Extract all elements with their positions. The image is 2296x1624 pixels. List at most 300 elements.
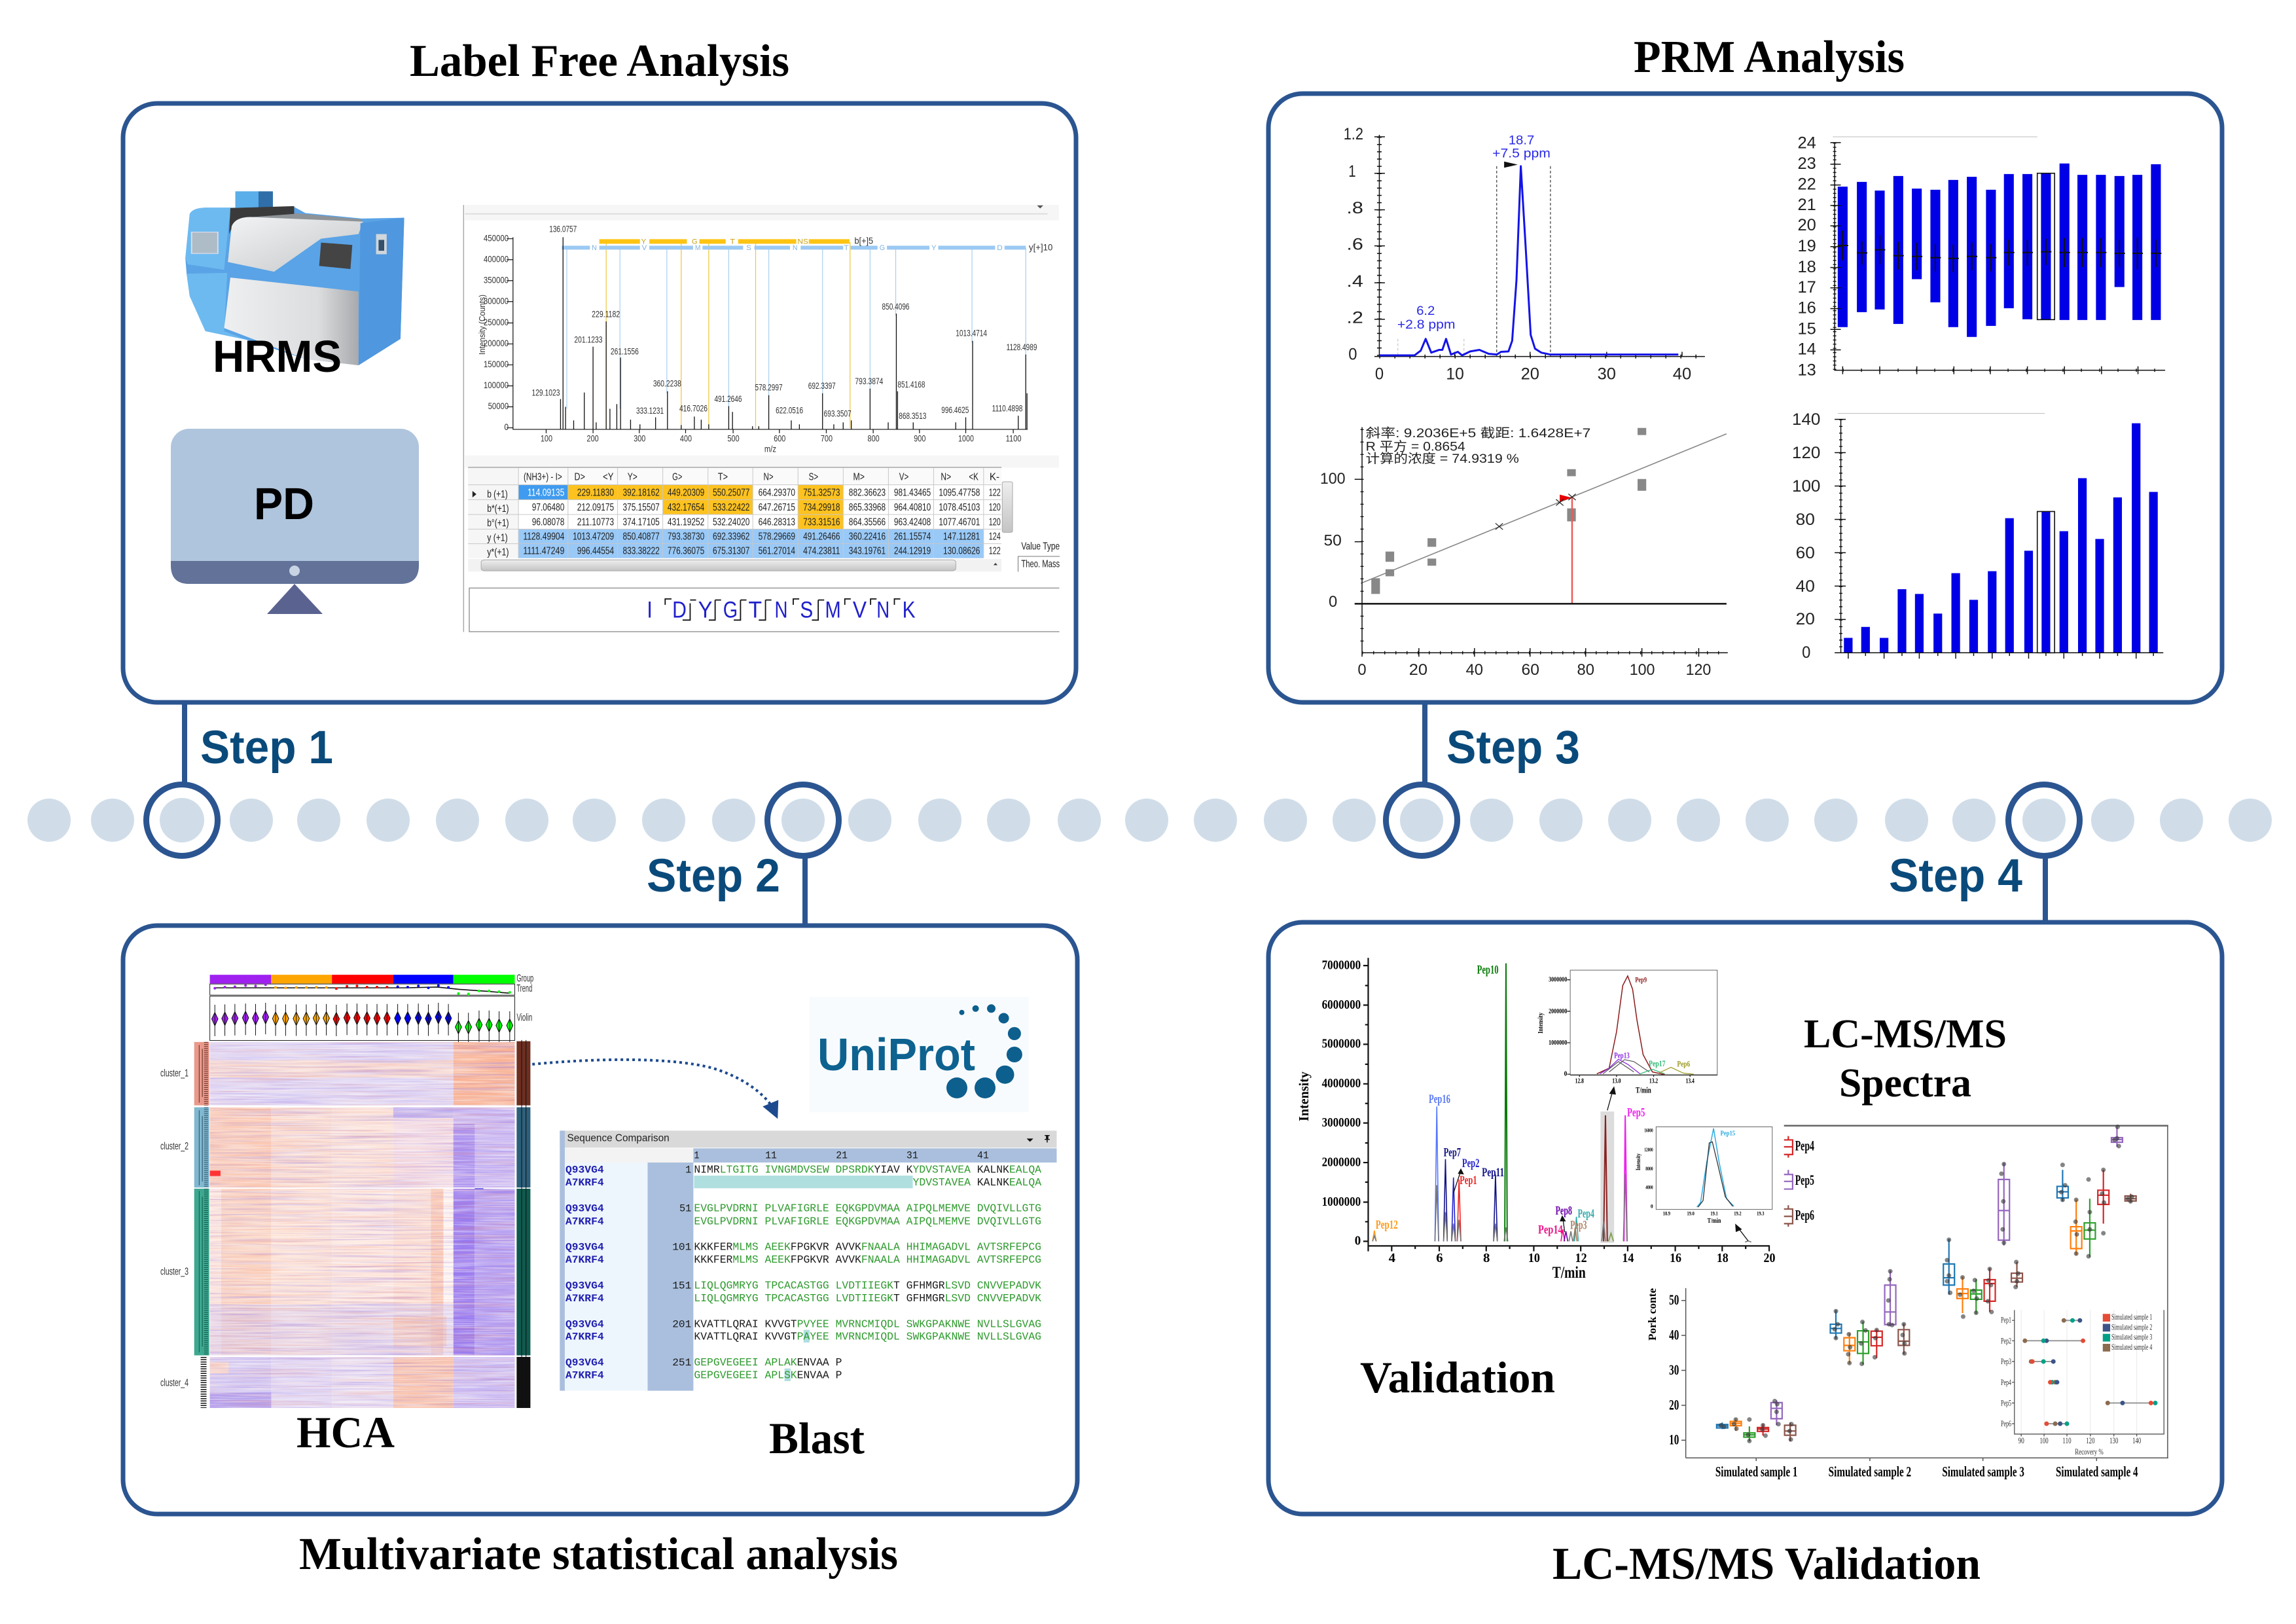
chart: total ion chromatogram of peptides: Pep5 xyxy=(1627,1106,1645,1119)
screenshot: fragment ion table: 491.26466 xyxy=(803,530,840,542)
screenshot: fragment ion table: 432.17654 xyxy=(668,501,704,513)
label: Blast: Blast xyxy=(769,1413,865,1463)
chart: pork content box plots: Pep1 xyxy=(2001,1316,2011,1325)
screenshot: BLAST sequence comparison: 151 xyxy=(672,1280,691,1292)
axis label: Intensity (Counts): Intensity (Counts) xyxy=(477,295,487,355)
screenshot: BLAST sequence comparison: KVATTLQRAI KVVGTPVYEE MVRNCMIQDL SWKGPAKNWE NVLLSLGVAG xyxy=(694,1318,1041,1331)
screenshot: BLAST sequence comparison: 21 xyxy=(836,1150,848,1162)
screenshot: peptide sequence with fragment markers: S xyxy=(800,597,813,623)
screenshot: BLAST sequence comparison: 201 xyxy=(672,1319,691,1331)
screenshot: MS/MS spectrum: M xyxy=(695,244,700,252)
chart: extracted ion chromatogram: 0 xyxy=(1375,365,1384,383)
chart: total ion chromatogram of peptides: Pep11 xyxy=(1482,1166,1504,1180)
screenshot: BLAST sequence comparison: A7KRF4 xyxy=(565,1178,604,1189)
text: Group xyxy=(516,973,533,984)
chart: total ion chromatogram of peptides: Pep16 xyxy=(1429,1092,1450,1106)
chart: total ion chromatogram of peptides: 1000000 xyxy=(1322,1194,1361,1208)
screenshot: fragment ion table: 124 xyxy=(989,530,1001,542)
icon: computer monitor xyxy=(171,429,419,614)
heatmap annotation: trend track xyxy=(210,984,514,995)
inset chart: Pep9 region: 13.2 xyxy=(1649,1077,1658,1085)
screenshot: fragment ion table: y*(+1) xyxy=(487,546,509,558)
screenshot: MS/MS spectrum: N xyxy=(793,244,798,252)
screenshot: fragment ion table: 664.29370 xyxy=(759,486,795,498)
axis label: Pork conte: Pork conte xyxy=(1646,1288,1659,1341)
chart: total ion chromatogram of peptides: 7000000 xyxy=(1322,957,1361,972)
chart: extracted ion chromatogram: .2 xyxy=(1346,309,1363,327)
chart: total ion chromatogram of peptides: 3000000 xyxy=(1322,1115,1361,1129)
panel: multivariate statistical analysis frame xyxy=(123,926,1077,1514)
screenshot: MS/MS spectrum: b[+]5 xyxy=(854,236,873,246)
chart: total ion chromatogram of peptides: 0 xyxy=(1355,1233,1361,1248)
chart: pork content box plots: Pep4 xyxy=(2001,1378,2011,1387)
screenshot: MS/MS spectrum: 850.4096 xyxy=(882,302,910,312)
chart: extracted ion chromatogram: .8 xyxy=(1346,199,1363,217)
screenshot: peptide sequence with fragment markers: K xyxy=(903,597,916,623)
screenshot: MS/MS spectrum: 1110.4898 xyxy=(992,404,1022,414)
screenshot: BLAST sequence comparison: Q93VG4 xyxy=(565,1242,604,1254)
screenshot: MS/MS spectrum: T xyxy=(730,238,735,245)
label: Step 3: Step 3 xyxy=(1446,722,1580,774)
screenshot: MS/MS spectrum: 692.3397 xyxy=(808,381,836,391)
chart: retention time bars: 13 xyxy=(1797,361,1816,380)
screenshot: fragment ion table: 147.11281 xyxy=(943,530,980,542)
screenshot: MS/MS spectrum: V xyxy=(642,244,647,252)
screenshot: peptide sequence with fragment markers: I xyxy=(647,597,653,623)
screenshot: BLAST sequence comparison: Q93VG4 xyxy=(565,1203,604,1215)
chart: extracted ion chromatogram: 1.2 xyxy=(1344,125,1363,143)
chart: pork content box plots: Simulated sample 4 xyxy=(2056,1464,2138,1480)
screenshot: MS/MS spectrum: 250000 xyxy=(484,317,509,328)
heatmap: right cluster strips xyxy=(516,1040,530,1408)
chart: pork content box plots xyxy=(1669,1126,2168,1480)
inset chart: Pep9 region: Pep9 xyxy=(1635,976,1647,984)
screenshot: fragment ion table: 120 xyxy=(989,501,1001,513)
screenshot: fragment ion table: K- xyxy=(990,471,999,482)
text: Violin xyxy=(516,1012,532,1023)
screenshot: fragment ion table: b*(+1) xyxy=(487,503,509,514)
chart: extracted ion chromatogram: 6.2 xyxy=(1416,303,1435,318)
screenshot: fragment ion table: 561.27014 xyxy=(759,545,795,556)
screenshot: MS/MS spectrum: NS xyxy=(798,238,808,245)
screenshot: fragment ion table: Y> xyxy=(628,471,637,482)
screenshot: fragment ion table: 212.09175 xyxy=(577,501,614,513)
screenshot: fragment ion table: 1077.46701 xyxy=(939,516,980,528)
text: Trend xyxy=(516,983,532,994)
panel: PRM analysis frame xyxy=(1268,94,2222,702)
screenshot: fragment ion table xyxy=(468,467,1060,571)
screenshot: fragment ion table: y (+1) xyxy=(487,532,508,543)
chart: pork content box plots: Simulated sample 2 xyxy=(1829,1464,1911,1480)
screenshot: MS/MS spectrum: 261.1556 xyxy=(611,347,639,357)
screenshot: BLAST sequence comparison: KKKFERMLMS AEEKFPGKVR AVVKFNAALA HHIMAGADVL AVTSRFEPCG xyxy=(694,1254,1041,1266)
screenshot: MS/MS spectrum: 868.3513 xyxy=(899,411,926,422)
screenshot: peptide sequence with fragment markers: Y xyxy=(698,597,712,623)
chart: hierarchical clustering heatmap xyxy=(160,973,533,1408)
label: Validation: Validation xyxy=(1360,1352,1555,1402)
screenshot: fragment ion table: 533.22422 xyxy=(713,501,749,513)
label: HCA: HCA xyxy=(296,1407,395,1457)
chart: retention time bars: 20 xyxy=(1797,216,1816,234)
screenshot: fragment ion table: <K xyxy=(969,471,978,482)
chart: extracted ion chromatogram: 20 xyxy=(1521,365,1539,383)
screenshot: BLAST sequence comparison: A7KRF4 xyxy=(565,1255,604,1266)
chart: total ion chromatogram of peptides: 6000000 xyxy=(1322,997,1361,1011)
screenshot: MS/MS spectrum: 200000 xyxy=(484,338,509,349)
inset chart: Pep9 region: 1000000 xyxy=(1549,1039,1567,1047)
chart: calibration curve: 斜率: 9.2036E+5 截距: 1.6428E+7 xyxy=(1366,426,1590,441)
screenshot: MS/MS spectrum: T xyxy=(844,244,849,252)
inset chart: Pep9 region: Pep6 xyxy=(1677,1059,1690,1068)
chart: pork content box plots: 20 xyxy=(1669,1397,1679,1413)
screenshot: fragment ion table: 793.38730 xyxy=(668,530,704,542)
chart: retention time bars: 16 xyxy=(1797,299,1816,317)
screenshot: MS/MS spectrum: 136.0757 xyxy=(549,225,577,234)
chart: calibration curve: 20 xyxy=(1409,660,1427,678)
screenshot: fragment ion table: D> xyxy=(575,471,585,482)
screenshot: MS/MS spectrum: 129.1023 xyxy=(531,388,560,398)
label: HRMS: HRMS xyxy=(213,331,342,382)
screenshot: MS/MS spectrum xyxy=(463,205,1059,632)
screenshot: fragment ion table: 882.36623 xyxy=(849,486,886,498)
label: PD: PD xyxy=(254,478,314,529)
screenshot: MS/MS spectrum: 333.1231 xyxy=(636,406,664,416)
screenshot: fragment ion table: 734.29918 xyxy=(803,501,840,513)
inset chart: Pep15 region: 18.9 xyxy=(1663,1210,1670,1217)
screenshot: BLAST sequence comparison: EVGLPVDRNI PLVAFIGRLE EQKGPDVMAA AIPQLMEMVE DVQIVLLGTG xyxy=(694,1203,1041,1215)
screenshot: fragment ion table: 963.42408 xyxy=(894,516,931,528)
screenshot: MS/MS spectrum: Y xyxy=(931,244,937,252)
screenshot: fragment ion table: 1078.45103 xyxy=(939,501,980,513)
timeline: dots xyxy=(27,798,2272,842)
screenshot: MS/MS spectrum: 201.1233 xyxy=(574,335,602,345)
screenshot: fragment ion table: 229.11830 xyxy=(577,486,614,498)
screenshot: fragment ion table: 850.40877 xyxy=(622,530,660,542)
screenshot: BLAST sequence comparison: YDVSTAVEA KALNKEALQA xyxy=(913,1177,1041,1189)
axis label: inset Intensity: Intensity xyxy=(1537,1013,1545,1034)
chart: retention time bars xyxy=(1797,134,2165,380)
chart: retention time bars: 23 xyxy=(1797,154,1816,173)
screenshot: fragment ion table: 97.06480 xyxy=(532,501,564,513)
label: Step 2: Step 2 xyxy=(647,850,780,902)
chart: total ion chromatogram of peptides: 2000000 xyxy=(1322,1154,1361,1169)
inset chart: Pep15 region: 12000 xyxy=(1644,1147,1653,1153)
screenshot: peptide sequence with fragment markers: T xyxy=(749,597,762,623)
chart: pork content box plots: 90 xyxy=(2018,1436,2024,1445)
screenshot: fragment ion table: G> xyxy=(672,471,682,482)
heatmap annotation: violin track xyxy=(210,996,514,1044)
chart: extracted ion chromatogram xyxy=(1344,125,1705,383)
chart: calibration curve xyxy=(1320,426,1728,678)
chart: total ion chromatogram of peptides: Pep14 xyxy=(1538,1223,1563,1236)
chart: pork content box plots: 100 xyxy=(2039,1436,2049,1445)
screenshot: peptide sequence with fragment markers xyxy=(469,588,1060,632)
screenshot: fragment ion table: 1128.49904 xyxy=(523,530,564,542)
screenshot: BLAST sequence comparison: KVATTLQRAI KVVGTPAYEE MVRNCMIQDL SWKGPAKNWE NVLLSLGVAG xyxy=(694,1331,1041,1343)
chart: peak area bars: 140 xyxy=(1792,410,1820,429)
screenshot: fragment ion table: 964.40810 xyxy=(894,501,931,513)
screenshot: fragment ion table: 865.33968 xyxy=(849,501,886,513)
screenshot: MS/MS spectrum: G xyxy=(880,244,885,252)
heatmap: labels: cluster_4 xyxy=(160,1377,188,1388)
chart: total ion chromatogram of peptides: T/min xyxy=(1552,1263,1586,1282)
screenshot: BLAST sequence comparison: 1 xyxy=(694,1150,700,1162)
screenshot: fragment ion table: 244.12919 xyxy=(894,545,931,556)
chart: total ion chromatogram of peptides: Pep8 xyxy=(1555,1204,1572,1218)
chart: pork content box plots: 10 xyxy=(1669,1432,1679,1448)
inset chart: Pep9 region: 0 xyxy=(1564,1070,1567,1077)
screenshot: fragment ion table: b°(+1) xyxy=(487,517,509,528)
chart: total ion chromatogram of peptides: Pep2 xyxy=(1462,1157,1479,1170)
screenshot: MS/MS spectrum: 0 xyxy=(504,422,509,433)
screenshot: BLAST sequence comparison: A7KRF4 xyxy=(565,1370,604,1382)
screenshot: peptide sequence with fragment markers: N xyxy=(876,597,889,623)
chart: pork content box plots: Pep5 xyxy=(2001,1398,2011,1407)
chart: peak area bars: 80 xyxy=(1796,511,1815,529)
screenshot: MS/MS spectrum: y[+]10 xyxy=(1029,243,1052,253)
screenshot: fragment ion table: 550.25077 xyxy=(713,486,749,498)
title: PRM Analysis: PRM Analysis xyxy=(1634,32,1905,82)
chart: peak area bars: 0 xyxy=(1802,643,1810,662)
icon: HRMS instrument xyxy=(185,191,404,365)
screenshot: MS/MS spectrum: 578.2997 xyxy=(755,383,783,393)
arrow: dotted curve from heatmap to UniProt xyxy=(532,1060,778,1119)
screenshot: peptide sequence with fragment markers: M xyxy=(825,597,841,623)
chart: pork content box plots: 130 xyxy=(2109,1436,2118,1445)
screenshot: BLAST sequence comparison: GEPGVEGEEI APLSKENVAA P xyxy=(694,1369,842,1382)
chart: extracted ion chromatogram: 0 xyxy=(1348,345,1357,364)
screenshot: fragment ion table: 1013.47209 xyxy=(573,530,614,542)
chart: extracted ion chromatogram: 10 xyxy=(1446,365,1464,383)
screenshot: MS/MS spectrum: 350000 xyxy=(484,275,509,285)
chart: peak area bars: 40 xyxy=(1796,577,1815,596)
screenshot: MS/MS spectrum: Y xyxy=(641,238,647,245)
screenshot: peptide sequence with fragment markers: N xyxy=(775,597,788,623)
screenshot: MS/MS spectrum: 500 xyxy=(728,433,740,444)
screenshot: MS/MS spectrum: 900 xyxy=(914,433,925,444)
chart: pork content box plots: 40 xyxy=(1669,1327,1679,1343)
screenshot: fragment ion table: N> xyxy=(764,471,774,482)
inset chart: Pep9 region: T/min xyxy=(1636,1085,1651,1094)
inset chart: Pep15 region: 19.0 xyxy=(1687,1210,1695,1217)
title: Label Free Analysis: Label Free Analysis xyxy=(410,36,789,86)
chart: pork content box plots: Simulated sample 4 xyxy=(2111,1343,2152,1352)
heatmap: cluster 1 xyxy=(210,1042,514,1106)
screenshot: BLAST sequence comparison: Q93VG4 xyxy=(565,1164,604,1176)
inset chart: Pep15 region: 19.2 xyxy=(1734,1210,1742,1217)
screenshot: fragment ion table: 996.44554 xyxy=(577,545,614,556)
chart: peak area bars: 20 xyxy=(1796,610,1815,628)
chart: retention time bars: 19 xyxy=(1797,237,1816,255)
chart: peak area bars: 60 xyxy=(1796,544,1815,562)
screenshot: fragment ion table: 532.24020 xyxy=(713,516,749,528)
screenshot: BLAST sequence comparison: Sequence Comparison xyxy=(567,1132,670,1144)
screenshot: BLAST sequence comparison: 101 xyxy=(672,1242,691,1254)
screenshot: MS/MS spectrum: 793.3874 xyxy=(855,376,884,387)
screenshot: MS/MS spectrum: 229.1182 xyxy=(592,310,620,319)
chart: total ion chromatogram of peptides: 5000000 xyxy=(1322,1036,1361,1051)
screenshot: fragment ion table: S> xyxy=(809,471,818,482)
screenshot: fragment ion table: 261.15574 xyxy=(894,530,931,542)
chart: pork content box plots: Pep6 xyxy=(1795,1207,1814,1223)
panel: LC-MS/MS validation frame xyxy=(1268,922,2222,1514)
chart: pork content box plots: Simulated sample 3 xyxy=(1942,1464,2024,1480)
chart: extracted ion chromatogram: .6 xyxy=(1346,236,1363,254)
screenshot: MS/MS spectrum: 400 xyxy=(680,433,692,444)
screenshot: BLAST sequence comparison: GEPGVEGEEI APLAKENVAA P xyxy=(694,1357,842,1369)
chart: pork content box plots: Pep2 xyxy=(2001,1336,2011,1345)
screenshot: fragment ion table: 733.31516 xyxy=(803,516,840,528)
screenshot: MS/MS spectrum: 100 xyxy=(541,433,552,444)
screenshot: MS/MS spectrum: 1000 xyxy=(958,433,974,444)
screenshot: MS/MS spectrum: 700 xyxy=(821,433,833,444)
chart: calibration curve: 100 xyxy=(1320,469,1346,487)
chart: total ion chromatogram of peptides: 10 xyxy=(1528,1250,1540,1265)
chart: total ion chromatogram of peptides: Pep4 xyxy=(1577,1207,1594,1220)
chart: total ion chromatogram of peptides: 6 xyxy=(1436,1250,1443,1265)
screenshot: MS/MS spectrum: 360.2238 xyxy=(653,379,681,389)
screenshot: MS/MS spectrum: 800 xyxy=(868,433,880,444)
chart: total ion chromatogram of peptides: 18 xyxy=(1717,1250,1729,1265)
chart: extracted ion chromatogram: +7.5 ppm xyxy=(1492,146,1551,160)
heatmap: cluster 2 xyxy=(210,1108,514,1187)
screenshot: MS/MS spectrum: 622.0516 xyxy=(776,406,803,416)
inset chart: Pep9 region: Pep17 xyxy=(1649,1059,1666,1068)
chart: extracted ion chromatogram: 40 xyxy=(1673,365,1691,383)
screenshot: MS/MS spectrum: 300 xyxy=(634,433,645,444)
chart: pork content box plots: Pep6 xyxy=(2001,1419,2011,1428)
chart: total ion chromatogram of peptides: Pep12 xyxy=(1376,1218,1398,1231)
chart: total ion chromatogram of peptides: 12 xyxy=(1575,1250,1587,1265)
chart: pork content box plots: 110 xyxy=(2062,1436,2072,1445)
chart: pork content box plots: Simulated sample 2 xyxy=(2111,1322,2152,1331)
screenshot: fragment ion table: 122 xyxy=(989,486,1001,498)
chart: retention time bars: 22 xyxy=(1797,175,1816,193)
screenshot: MS/MS spectrum: 1013.4714 xyxy=(956,329,987,338)
logo: UniProt xyxy=(810,997,1029,1112)
screenshot: BLAST sequence comparison: KKKFERMLMS AEEKFPGKVR AVVKFNAALA HHIMAGADVL AVTSRFEPCG xyxy=(694,1241,1041,1254)
screenshot: BLAST sequence comparison: 11 xyxy=(765,1150,777,1162)
chart: peak area bars: 120 xyxy=(1792,444,1820,462)
screenshot: MS/MS spectrum: 200 xyxy=(587,433,599,444)
chart: pork content box plots: Simulated sample 3 xyxy=(2111,1332,2152,1342)
inset chart: Pep9 region: 3000000 xyxy=(1549,976,1567,984)
screenshot: BLAST sequence comparison: 31 xyxy=(906,1150,918,1162)
label: Spectra: Spectra xyxy=(1839,1061,1971,1106)
screenshot: fragment ion table: 120 xyxy=(989,516,1001,528)
chart: peak area bars: 100 xyxy=(1792,477,1820,496)
label: Step 4: Step 4 xyxy=(1889,850,2022,902)
screenshot: MS/MS spectrum: S xyxy=(746,244,751,252)
screenshot: MS/MS spectrum: 1128.4989 xyxy=(1007,342,1037,353)
inset chart: Pep9 region xyxy=(1549,970,1717,1094)
screenshot: BLAST sequence comparison: EVGLPVDRNI PLVAFIGRLE EQKGPDVMAA AIPQLMEMVE DVQIVLLGTG xyxy=(694,1216,1041,1228)
screenshot: fragment ion table: 1095.47758 xyxy=(939,486,980,498)
screenshot: fragment ion table: <Y xyxy=(603,471,614,482)
title: LC-MS/MS Validation: LC-MS/MS Validation xyxy=(1552,1539,1981,1589)
chart: pork content box plots: 30 xyxy=(1669,1362,1679,1378)
text: Value Type xyxy=(1021,540,1060,552)
recovery inset xyxy=(1998,1310,2165,1456)
screenshot: fragment ion table: 692.33962 xyxy=(713,530,749,542)
chart: retention time bars: 24 xyxy=(1797,134,1816,152)
screenshot: MS/MS spectrum: N xyxy=(592,244,597,252)
chart: pork content box plots: 50 xyxy=(1669,1292,1679,1308)
screenshot: fragment ion table: M> xyxy=(853,471,865,482)
screenshot: fragment ion table: T> xyxy=(718,471,728,482)
axis label: Intensity: Intensity xyxy=(1296,1072,1312,1121)
chart: calibration curve: 0 xyxy=(1357,660,1367,678)
inset chart: Pep15 region: 19.1 xyxy=(1710,1210,1718,1217)
screenshot: peptide sequence with fragment markers: V xyxy=(853,597,867,623)
inset chart: Pep15 region: 8000 xyxy=(1645,1165,1653,1172)
screenshot: fragment ion table: 449.20309 xyxy=(668,486,704,498)
inset chart: Pep9 region: 13.0 xyxy=(1612,1077,1621,1085)
title: Multivariate statistical analysis: Multivariate statistical analysis xyxy=(299,1529,898,1579)
screenshot: BLAST sequence comparison: A7KRF4 xyxy=(565,1216,604,1228)
screenshot: BLAST sequence comparison: Q93VG4 xyxy=(565,1280,604,1292)
screenshot: BLAST sequence comparison: Q93VG4 xyxy=(565,1319,604,1331)
inset chart: Pep15 region: 19.3 xyxy=(1757,1210,1765,1217)
logo: UniProt: UniProt xyxy=(817,1029,975,1080)
chart: retention time bars: 18 xyxy=(1797,258,1816,276)
screenshot: MS/MS spectrum: 693.3507 xyxy=(824,408,852,419)
screenshot: MS/MS spectrum: 851.4168 xyxy=(897,380,925,390)
screenshot: MS/MS spectrum: 400000 xyxy=(484,254,509,264)
chart: retention time bars: 14 xyxy=(1797,340,1816,359)
inset chart: Pep15 region: 4000 xyxy=(1645,1184,1653,1191)
chart: retention time bars: 15 xyxy=(1797,320,1816,338)
screenshot: fragment ion table: 1111.47249 xyxy=(523,545,564,556)
screenshot: MS/MS spectrum: G xyxy=(692,238,698,245)
screenshot: BLAST sequence comparison: 251 xyxy=(672,1358,691,1369)
chart: retention time bars: 17 xyxy=(1797,278,1816,297)
chart: total ion chromatogram of peptides: 14 xyxy=(1622,1250,1634,1265)
chart: total ion chromatogram of peptides: 4000000 xyxy=(1322,1075,1361,1091)
screenshot: BLAST sequence comparison: 51 xyxy=(679,1203,691,1215)
screenshot: MS/MS spectrum: 996.4625 xyxy=(941,405,969,416)
chart: pork content box plots: 140 xyxy=(2132,1436,2141,1445)
inset chart: Pep9 region: 13.4 xyxy=(1686,1077,1695,1085)
chart: calibration curve: 40 xyxy=(1466,660,1483,678)
screenshot: fragment ion table: 431.19252 xyxy=(668,516,704,528)
screenshot: MS/MS spectrum: 1100 xyxy=(1006,433,1022,444)
chart: total ion chromatogram of peptides: 20 xyxy=(1764,1250,1775,1265)
chart: calibration curve: 0 xyxy=(1329,592,1337,610)
screenshot: BLAST sequence comparison: Q93VG4 xyxy=(565,1358,604,1369)
label: LC-MS/MS: LC-MS/MS xyxy=(1804,1012,2007,1056)
screenshot: MS/MS spectrum: 491.2646 xyxy=(714,394,742,405)
chart: total ion chromatogram of peptides: Pep1 xyxy=(1460,1174,1477,1187)
screenshot: MS/MS spectrum: 416.7026 xyxy=(679,404,708,414)
screenshot: BLAST sequence comparison xyxy=(560,1130,1056,1391)
chart: total ion chromatogram of peptides: Pep3 xyxy=(1570,1219,1587,1232)
heatmap: cluster 3 xyxy=(210,1189,514,1356)
chart: total ion chromatogram of peptides: 8 xyxy=(1483,1250,1490,1265)
screenshot: fragment ion table: 374.17105 xyxy=(622,516,660,528)
heatmap: labels: cluster_2 xyxy=(160,1141,188,1152)
screenshot: MS/MS spectrum: D xyxy=(997,244,1003,252)
screenshot: BLAST sequence comparison: NIMRLTGITG IVNGMDVSEW DPSRDKYIAV KYDVSTAVEA KALNKEALQA xyxy=(694,1164,1041,1176)
chart: calibration curve: 60 xyxy=(1522,660,1539,678)
screenshot: MS/MS spectrum: 50000 xyxy=(488,401,509,412)
legend fragments: Pep4 Pep5 Pep6 xyxy=(1784,1136,1793,1227)
screenshot: BLAST sequence comparison: LIQLQGMRYG TPCACASTGG LVDTIIEGKT GFHMGRLSVD CNVVEPADVK xyxy=(694,1280,1041,1292)
chart: calibration curve: 80 xyxy=(1577,660,1594,678)
screenshot: fragment ion table: 122 xyxy=(989,545,1001,556)
chart: calibration curve: 50 xyxy=(1324,532,1342,549)
screenshot: fragment ion table: 578.29669 xyxy=(759,530,795,542)
